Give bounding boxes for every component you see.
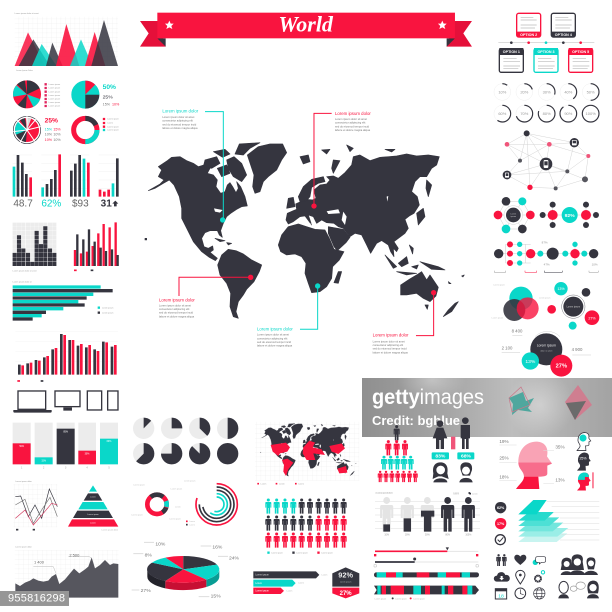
pie 1 legend: Lorem ipsum	[49, 101, 60, 104]
line chart: Lorem ipsum dolor	[15, 480, 32, 483]
icon: chat bubbles	[533, 557, 546, 565]
venn diagram: Lorem ipsum	[539, 296, 551, 299]
hexagon stat badge: 27%	[340, 591, 352, 597]
arrow bars: Lorem	[255, 582, 262, 585]
arrow bars: Lorem	[287, 589, 293, 592]
people grid: Lorem ipsum	[296, 551, 308, 554]
radar outline	[509, 387, 530, 412]
head tier chart: 19%	[499, 439, 509, 444]
icon: couple conversation	[558, 581, 599, 598]
horizontal bars: Lorem ipsum dolor sit	[13, 281, 32, 284]
callout: North America: Lorem ipsum dolor	[162, 109, 199, 114]
percentage rings: 10%	[498, 89, 507, 94]
head tier chart: 13%	[555, 478, 565, 483]
fill column chart: 50%	[19, 446, 24, 448]
people grid: Lorem ipsum	[321, 551, 333, 554]
callout: Europe: sed do eiusmod tempor incid	[335, 124, 369, 128]
callout: North America: Lorem ipsum dolor sit amet	[162, 115, 195, 119]
bubble process row: 87%	[542, 240, 548, 244]
portrait female	[433, 462, 449, 482]
fill column chart: 3	[65, 468, 67, 470]
bubble cluster 3	[547, 282, 599, 330]
small head icons	[577, 433, 593, 491]
venn diagram	[492, 283, 551, 321]
panel: left column bottom	[0, 410, 119, 606]
pie 1 legend	[46, 83, 60, 108]
network diagram	[503, 130, 590, 190]
pie 3 values: 25%	[45, 118, 58, 125]
panel: bottom right	[374, 491, 599, 600]
stripe bar 2: Lorem ipsum	[375, 597, 386, 600]
panel: left column middle	[13, 222, 118, 410]
highlighted world map	[255, 422, 359, 485]
highlighted world map: Lorem	[261, 482, 267, 485]
panel: right column top	[494, 13, 599, 190]
pie chart 3	[13, 116, 41, 144]
callout: Australia: Lorem ipsum dolor	[373, 333, 409, 338]
large bubble group: 27%	[556, 364, 567, 370]
credit line: Credit: bgblue	[372, 413, 460, 428]
head tier chart: 35%	[555, 444, 565, 449]
small donut chart: Lorem ipsum	[171, 487, 182, 490]
pie 3 values	[45, 118, 61, 142]
small stat badges: 17%	[497, 522, 505, 526]
option 2 top: OPTION 4	[555, 33, 573, 37]
getty logo: gettyimages	[372, 386, 484, 409]
icon: calendar: 18	[498, 594, 504, 600]
fill column chart: 15%	[41, 460, 46, 462]
callout: North America: consectetur adipiscing elit	[162, 119, 193, 123]
callout: South America: sed do eiusmod tempor incid	[159, 311, 193, 315]
people grid: Lorem ipsum	[271, 551, 283, 554]
fill column chart: 85%	[63, 431, 68, 433]
small stat badges	[495, 502, 506, 545]
callout: South America: consectetur adipiscing elit	[159, 307, 190, 311]
big numbers row: 48.7	[13, 199, 33, 210]
pie 2 values: 50%	[103, 84, 116, 91]
horizontal bars: Lorem ipsum	[102, 311, 114, 314]
bubble cluster 1: Lorem	[511, 212, 516, 215]
pie 1 legend: Lorem ipsum	[49, 98, 60, 101]
concentric ring chart	[184, 480, 237, 526]
option 5 bottom: OPTION 5	[572, 50, 589, 54]
callout: Australia: consectetur adipiscing elit	[373, 343, 403, 347]
arrow bars: Lorem ipsum	[255, 574, 269, 577]
watermark band	[362, 378, 612, 437]
small donut chart: Lorem ipsum	[131, 513, 143, 516]
pie 2 values: 25%	[103, 95, 113, 101]
large bubble group: Lorem ipsum	[537, 343, 556, 347]
percent badges	[432, 452, 474, 460]
pie 3 values: 10%	[53, 133, 61, 137]
head tier chart	[499, 439, 565, 489]
horizontal bars	[13, 281, 114, 319]
callout: Australia: labore et dolore magna aliqua	[373, 350, 408, 354]
pie 1 legend: Lorem ipsum	[49, 83, 60, 86]
area chart: 2 500	[69, 552, 80, 557]
donut legend	[104, 118, 119, 132]
3D pie labels: 10%	[155, 542, 166, 548]
icon: devices	[18, 391, 118, 410]
percentage rings: 80%	[543, 111, 551, 116]
icon: laptop base	[13, 410, 52, 413]
callout: North America: labore et dolore magna aliqua	[162, 126, 198, 130]
height comparison people: 80%	[445, 534, 450, 536]
footer legend: Lorem	[472, 492, 478, 495]
hexagon stat badge: 92%	[338, 570, 353, 579]
bubble cluster 1	[494, 197, 535, 233]
pie 3 values: 10%	[45, 133, 53, 137]
ribbon folds	[157, 38, 455, 47]
percentage rings: 60%	[498, 111, 507, 116]
percentage rings: 70%	[520, 111, 529, 116]
height comparison people: Lorem	[453, 492, 459, 495]
bubble process row: 10%	[592, 262, 598, 266]
star right	[438, 21, 447, 29]
big numbers row	[13, 199, 118, 210]
horizontal bars: Lorem ipsum	[102, 306, 114, 309]
map callouts	[159, 109, 436, 354]
callout: Europe: labore et dolore magna aliqua	[335, 128, 371, 132]
callout: Europe: Lorem ipsum dolor	[335, 111, 371, 116]
small donut chart: Lorem	[175, 506, 181, 509]
large bubble group: 8 400	[512, 329, 523, 334]
pyramid chart	[68, 485, 118, 532]
paired column chart	[15, 332, 118, 381]
3D pie labels: 24%	[229, 555, 240, 561]
diamond chart pink face	[565, 385, 592, 420]
small bar charts	[13, 154, 118, 197]
pyramid chart: Lorem ipsum	[87, 513, 99, 516]
pie 1 legend: Lorem ipsum	[49, 87, 60, 90]
head tier chart: 25%	[499, 456, 509, 461]
pie 1 legend: Lorem ipsum	[49, 90, 60, 93]
title banner	[140, 11, 472, 47]
area chart	[15, 545, 119, 598]
icon: cloud download	[494, 572, 510, 582]
3D pie labels: 27%	[141, 588, 151, 594]
callout: Europe: Lorem ipsum dolor sit amet	[335, 117, 367, 121]
radar chart behind band	[509, 392, 534, 415]
venn diagram: Lorem ipsum	[493, 283, 505, 286]
area chart: 1 400	[34, 560, 45, 565]
slider 2	[374, 557, 478, 567]
stripe bar 2: Lorem ipsum	[413, 597, 425, 600]
pie 2 values: 10%	[112, 103, 120, 107]
height comparison people: 30%	[405, 534, 410, 536]
callout: Australia	[373, 290, 436, 354]
bubble cluster 3: 27%	[588, 316, 596, 320]
percentage rings	[494, 84, 599, 122]
percentage rings: 40%	[564, 89, 573, 94]
cell grid chart	[15, 223, 54, 266]
callout: Europe: consectetur adipiscing elit	[335, 121, 366, 125]
callout: Africa: Lorem ipsum dolor sit amet	[257, 333, 289, 337]
large bubble group: 4 900	[572, 347, 583, 352]
star left	[165, 21, 174, 29]
area chart: Lorem ipsum dolor	[15, 545, 32, 548]
pie chart 2	[75, 85, 95, 105]
diamond chart grey face	[566, 401, 586, 420]
hexagon stat badge	[332, 567, 359, 598]
fill column chart: 2	[43, 468, 45, 470]
ribbon right tail	[447, 21, 472, 47]
bubble cluster 3: 13%	[557, 287, 565, 291]
pie 3 values: 10%	[45, 138, 53, 142]
3D pie labels	[132, 542, 240, 600]
large bubble group	[502, 329, 591, 377]
footer legend: Lorem	[453, 492, 459, 495]
title text: World	[278, 11, 334, 36]
donut legend: Lorem ipsum	[107, 129, 119, 132]
main world map	[145, 143, 464, 318]
image number box: 955816298	[8, 593, 65, 605]
large bubble group: dolor sit amet	[540, 349, 553, 352]
concentric ring chart: Lorem ipsum	[184, 480, 196, 483]
bubble cluster 1: ipsum	[511, 216, 516, 218]
red and dark columns	[74, 222, 118, 270]
height comparison people: 50%	[425, 534, 430, 536]
small donut chart	[131, 483, 182, 520]
mountain chart	[15, 12, 118, 72]
big numbers row: 62%	[41, 199, 61, 210]
head tier chart: 18%	[499, 474, 509, 479]
stripe bar 2	[374, 586, 479, 600]
panel: left column top	[13, 12, 120, 210]
layered stack chart	[518, 500, 599, 542]
mountain chart: Lorem Ipsum Dolor	[16, 69, 33, 72]
callout: South America: Lorem ipsum dolor sit amet	[159, 303, 191, 307]
bubble cluster 2: 92%	[565, 213, 575, 219]
cell grid caption: Lorem ipsum dolor sit amet	[13, 269, 37, 272]
option boxes	[498, 13, 594, 72]
venn diagram: Lorem ipsum	[492, 316, 503, 319]
donut legend: Lorem ipsum	[107, 125, 119, 128]
panel: right column middle	[492, 197, 599, 377]
icon: location pin	[516, 570, 525, 584]
callout: Australia: sed do eiusmod tempor incid	[373, 347, 407, 351]
callout: North America	[162, 109, 225, 223]
option 1 top: OPTION 2	[520, 33, 537, 37]
callout: Africa: sed do eiusmod tempor incid	[257, 340, 291, 344]
height comparison people: Lorem ipsum dolor	[375, 491, 392, 494]
bubble process row	[494, 240, 598, 272]
height comparison people: 100%	[465, 534, 471, 536]
icon: calendar	[495, 589, 507, 600]
icon: globe	[534, 588, 545, 599]
height comparison people: 10%	[384, 534, 389, 536]
option 3 bottom: OPTION 1	[503, 50, 520, 54]
callout: Africa	[257, 283, 320, 348]
concentric ring chart: Lorem	[189, 520, 195, 523]
line chart	[13, 480, 57, 530]
percentage rings: 100%	[586, 111, 596, 116]
ribbon body	[157, 13, 455, 38]
3D pie chart	[147, 556, 219, 590]
callout: Africa: Lorem ipsum dolor	[257, 327, 293, 332]
fill column chart	[13, 423, 118, 470]
option 4 bottom: OPTION 3	[537, 50, 555, 54]
percent badges: 83%	[435, 454, 446, 460]
timeline	[498, 41, 594, 44]
donut legend: Lorem	[107, 122, 113, 125]
footer legend	[453, 492, 478, 495]
panel: people stats	[377, 417, 593, 495]
callout: North America: sed do eiusmod tempor incid	[162, 122, 197, 126]
fill column chart: 5	[108, 468, 110, 470]
concentric ring chart: Lorem	[189, 523, 195, 526]
fill column chart: 4	[86, 468, 88, 470]
percentage rings: 90%	[564, 111, 573, 116]
male figure	[461, 417, 470, 449]
small donut chart: Lorem ipsum	[169, 517, 181, 520]
people pyramid: Lorem ipsum dolor	[377, 492, 393, 495]
fill column chart: 1	[21, 468, 23, 470]
gender comparison	[432, 417, 474, 482]
icon: clock	[515, 588, 526, 599]
small stat badges: 62%	[497, 506, 505, 510]
highlighted world map: Lorem	[298, 482, 304, 485]
icon: people pair	[496, 554, 507, 566]
callout: Europe	[311, 111, 371, 209]
arrow bars: Lorem ipsum	[255, 590, 269, 593]
pie 3 values: 15%	[45, 128, 53, 132]
callout: Australia: Lorem ipsum dolor sit amet	[373, 339, 405, 343]
pie 3 values: 15%	[53, 128, 61, 132]
stripe bar 1	[374, 572, 479, 577]
percentage rings: 50%	[587, 89, 595, 94]
bubble process row: 47%	[544, 262, 550, 266]
female figure	[433, 420, 447, 449]
portrait male	[459, 462, 473, 482]
height comparison people	[375, 491, 480, 536]
small head icons: 25%	[579, 456, 587, 460]
fill column chart: 30%	[85, 453, 89, 455]
fraction pies	[133, 418, 238, 464]
pyramid chart: Lorem ipsum dolor	[102, 529, 118, 532]
icon: group portrait	[561, 554, 598, 575]
3D pie labels: 16%	[212, 545, 223, 551]
callout: South America: Lorem ipsum dolor	[159, 297, 195, 302]
3D pie labels: 15%	[211, 594, 221, 600]
icon: heart	[514, 555, 526, 565]
highlighted world map: Lorem	[279, 482, 285, 485]
large bubble group: 13%	[525, 359, 536, 365]
arrow bars	[253, 571, 328, 594]
people grid	[265, 498, 347, 554]
arrow bars: Lorem	[298, 581, 304, 584]
large bubble group: 2 100	[502, 346, 513, 351]
donut legend: Lorem ipsum	[107, 118, 119, 121]
pie 1 legend: Lorem ipsum	[49, 105, 60, 108]
small donut chart: Lorem ipsum	[133, 483, 145, 486]
3D pie labels: 8%	[145, 553, 152, 559]
arrow bars: Lorem	[322, 574, 328, 577]
pyramid chart: Lorem	[90, 522, 96, 525]
mountain chart: Lorem ipsum dolor sit amet	[15, 12, 39, 15]
bubble cluster 3: Lorem ipsum	[567, 305, 580, 308]
pie 2 values: 15%	[103, 103, 111, 107]
pie chart 1	[17, 84, 37, 104]
callout: South America	[159, 275, 253, 318]
percentage rings: 20%	[520, 89, 529, 94]
bubble cluster 2	[540, 202, 599, 228]
hexagon stat badge: Lorem ipsum	[340, 581, 352, 584]
percentage rings: 30%	[543, 89, 551, 94]
callout: Africa: labore et dolore magna aliqua	[257, 344, 293, 348]
big numbers row: $93	[72, 199, 89, 210]
percent badges: 68%	[461, 454, 472, 460]
icon: gears	[535, 571, 545, 582]
panel: bottom centre	[131, 418, 359, 600]
callout: South America: labore et dolore magna aliqua	[159, 314, 195, 318]
slider 1	[374, 547, 478, 556]
callout: Africa: consectetur adipiscing elit	[257, 336, 288, 340]
stripe bar 2: Lorem ipsum	[395, 597, 407, 600]
donut chart	[74, 118, 97, 142]
big numbers row: 31	[101, 199, 112, 210]
people pyramid	[377, 425, 418, 495]
ribbon left tail	[140, 21, 166, 47]
pyramid chart: Lorem	[90, 496, 96, 499]
pie 1 legend: Lorem ipsum	[49, 94, 60, 97]
pie 3 values: 10%	[53, 138, 61, 142]
pie 2 values	[103, 84, 120, 107]
fill column chart: 60%	[107, 441, 111, 443]
image number box	[0, 591, 69, 606]
